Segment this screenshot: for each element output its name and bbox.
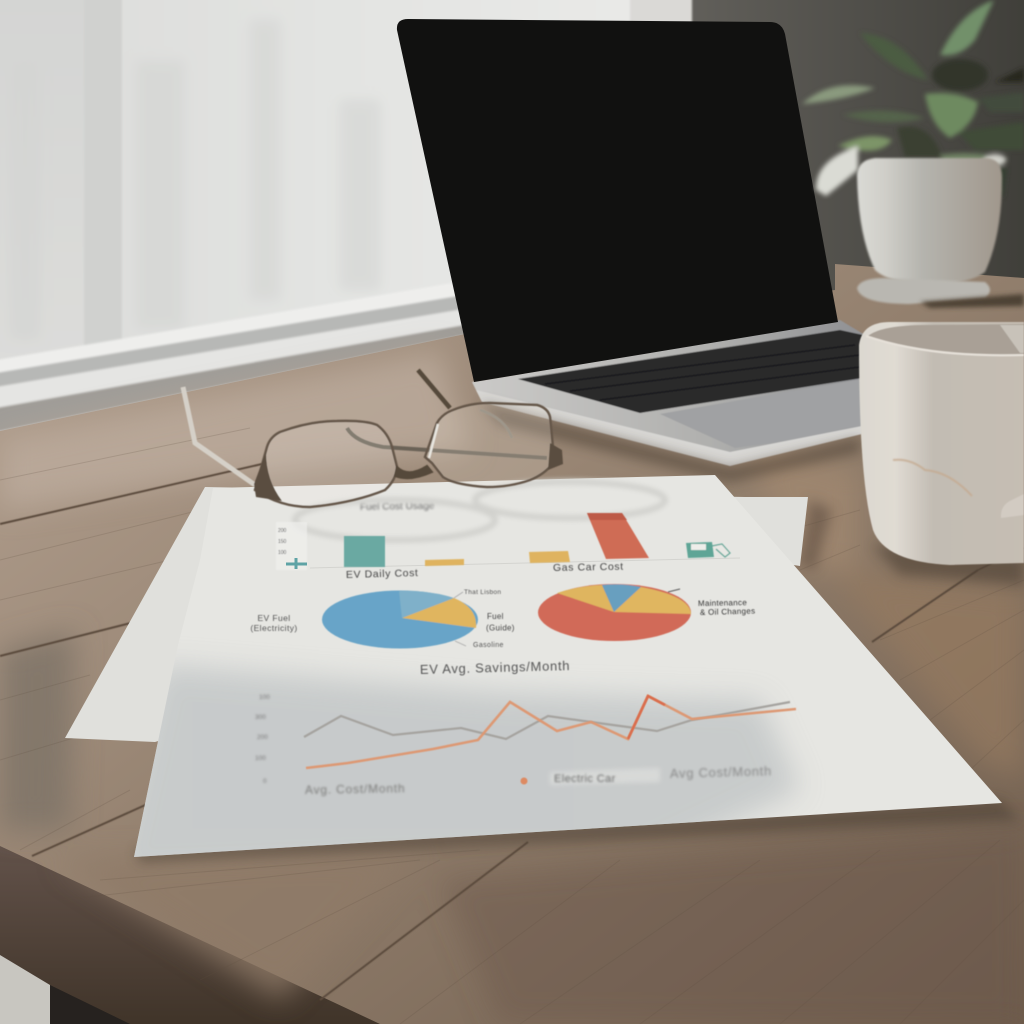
background wall (680, 0, 1024, 320)
window (0, 0, 692, 440)
right lens (425, 403, 553, 487)
keyboard (518, 330, 863, 413)
vertical mullion (84, 0, 122, 352)
pot saucer (857, 278, 990, 304)
slice: fuel yellow (402, 598, 476, 628)
label: oil changes: & Oil Changes (700, 607, 756, 617)
label: gas car cost: Gas Car Cost (553, 561, 624, 574)
line peak highlight (628, 696, 665, 739)
legend: average cost: Avg Cost/Month (670, 763, 772, 781)
table top (0, 264, 1024, 1024)
bridge (395, 466, 432, 478)
wood grain (0, 428, 1024, 1024)
line: orange gas (306, 696, 796, 768)
mug stain (893, 460, 972, 496)
front report sheet (110, 475, 1002, 880)
slice: yellow left (557, 585, 614, 612)
left lens (255, 421, 397, 507)
right temple (418, 370, 450, 408)
left hinge (254, 452, 282, 501)
bar chart: daily cost (276, 513, 740, 581)
bar: gas yellow (529, 551, 570, 563)
label: third slice: That Lisbon (464, 589, 501, 596)
plant pot (857, 158, 1002, 284)
plant leaves (802, 0, 1024, 197)
blurred outdoor streaks (10, 20, 380, 340)
label: gasoline: Gasoline (473, 642, 504, 649)
folded temple seen through lenses (347, 428, 547, 458)
window sill shadow (0, 324, 470, 432)
icon: fuel pump (686, 542, 730, 558)
label: EV fuel: EV Fuel (257, 613, 291, 623)
slice: light blue (399, 591, 454, 618)
report heading: Fuel Cost Usage (360, 501, 435, 513)
folded second temple (480, 410, 512, 438)
table strip right of saucer shadow (920, 294, 1024, 308)
bar: EV yellow (425, 559, 464, 566)
bar chart axis (310, 558, 740, 568)
icon: EV plug (286, 558, 307, 569)
mug interior (866, 324, 1024, 355)
legend: left axis caption: Avg. Cost/Month (305, 781, 406, 797)
line chart title: EV Avg. Savings/Month (420, 658, 570, 677)
table front edge (0, 846, 380, 1024)
lower pane sill band light (0, 280, 470, 373)
y axis labels: 200 (278, 528, 287, 534)
leader marker (668, 589, 680, 592)
y axis ticks: 300 (255, 714, 266, 721)
shadow band on sheet (134, 658, 802, 857)
plant and pot (802, 0, 1024, 308)
y axis labels: 150 (278, 539, 287, 545)
window panes (0, 0, 690, 440)
line: gray EV (304, 702, 790, 739)
line chart (255, 694, 796, 797)
legend highlight strip (550, 768, 660, 785)
legend: key text: Electric Car (554, 773, 616, 785)
window sill light (0, 308, 470, 408)
wood plank seams (0, 464, 1024, 1000)
label: electricity: (Electricity) (250, 623, 298, 633)
label: maintenance: Maintenance (698, 598, 747, 608)
right lens highlight (429, 424, 438, 458)
trackpad area (660, 379, 862, 448)
label: fuel: Fuel (487, 612, 504, 621)
right hinge (548, 443, 563, 470)
wood tone patches (0, 350, 1024, 1024)
left temple (183, 387, 255, 485)
mug handle (1001, 494, 1024, 518)
eyeglasses (183, 370, 563, 507)
coffee mug (859, 322, 1024, 565)
laptop (397, 19, 865, 466)
pie chart: EV (250, 589, 515, 649)
base front lip (476, 390, 862, 466)
bar: gas red (587, 513, 649, 559)
laptop base (472, 320, 865, 466)
label: guide: (Guide) (486, 624, 515, 632)
window top right frame (630, 0, 692, 24)
cast shadows on table (135, 402, 1024, 862)
y axis labels (276, 522, 307, 570)
glasses shadow on paper (295, 482, 665, 540)
y axis (284, 696, 286, 780)
bar: EV teal (344, 536, 385, 567)
pie chart: gas car (538, 584, 756, 641)
y axis ticks: 100 (259, 694, 270, 701)
pie leader lines (454, 592, 466, 646)
back sheet of paper (65, 487, 808, 742)
y axis ticks (255, 694, 270, 785)
slice: blue (602, 584, 641, 612)
floor under table (0, 955, 130, 1024)
y axis labels: 100 (278, 550, 287, 556)
lower pane sill band gray (0, 294, 470, 387)
y axis ticks: 200 (257, 734, 268, 741)
y axis ticks: 100 (255, 755, 266, 762)
laptop screen (397, 19, 838, 382)
mug body (859, 322, 1024, 565)
y axis ticks: 0 (263, 778, 267, 785)
keyboard keys (545, 345, 860, 400)
legend marker (520, 778, 528, 784)
left pane (0, 0, 84, 365)
slice: yellow right (614, 587, 691, 614)
label: EV daily cost: EV Daily Cost (346, 567, 419, 581)
